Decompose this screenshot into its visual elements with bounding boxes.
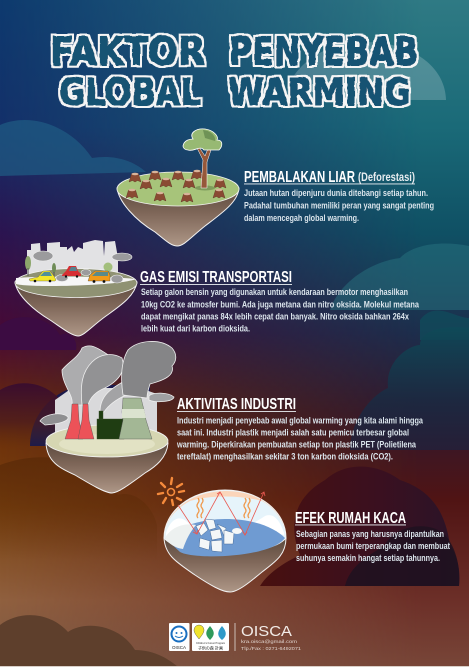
red car <box>62 266 81 278</box>
logo: OISCA: OISCA <box>172 645 186 650</box>
heat waves <box>197 498 250 518</box>
contact block: kra.oisca@gmail.com <box>241 639 297 645</box>
text: gas emisi <box>141 287 420 334</box>
text: aktivitas industri: saat ini. Industri plastik menjadi salah satu pemicu terbesar global <box>177 428 409 438</box>
heading: pembalakan liar: (Deforestasi) <box>358 172 415 184</box>
island: greenhouse dome <box>158 478 286 592</box>
red chimneys <box>65 404 94 439</box>
heading: efek rumah kaca: EFEK RUMAH KACA <box>295 510 406 527</box>
text: aktivitas industri <box>176 416 424 462</box>
title <box>50 30 418 114</box>
trees <box>25 256 112 277</box>
text: gas emisi: lebih kuat dari karbon dioksida. <box>141 324 250 334</box>
title: GLOBAL <box>59 71 201 114</box>
island: deforestation <box>117 129 239 246</box>
contact block <box>241 623 301 652</box>
factory building <box>97 411 124 439</box>
title: PENYEBAB <box>229 30 418 75</box>
island: transport <box>15 240 137 336</box>
title: WARMING <box>228 71 411 114</box>
heading: gas emisi: GAS EMISI TRANSPORTASI <box>140 269 292 286</box>
logo: children's forest program <box>192 623 229 651</box>
text: gas emisi: dapat mengikat panas 84x lebih cepat dan banyak. Nitro oksida bahkan 264x <box>141 312 410 322</box>
smoke <box>40 341 176 425</box>
yellow car <box>29 271 56 282</box>
island: industry <box>40 341 176 493</box>
logo: OISCA <box>169 623 190 651</box>
sea and ice <box>165 519 285 556</box>
text: efek rumah kaca <box>296 529 450 563</box>
text: aktivitas industri: tereftalat) menghasilkan sekitar 3 ton karbon dioksida (CO2). <box>177 452 393 462</box>
heading: aktivitas industri: AKTIVITAS INDUSTRI <box>177 396 296 413</box>
contact block: Tlp./Fax : 0271-6492071 <box>241 646 301 652</box>
contact block: OISCA <box>241 623 292 640</box>
tree <box>183 129 222 190</box>
cooling tower <box>119 398 152 439</box>
title: FAKTOR <box>50 30 205 75</box>
orange car <box>88 271 110 283</box>
text: pembalakan liar: dalam mencegah global warming. <box>244 213 359 223</box>
logo: children's forest program: Children's Forest Program <box>196 642 225 645</box>
smoke clouds <box>33 251 132 283</box>
logo: children's forest program: 子供の森 計画 <box>198 644 223 650</box>
sun <box>158 478 184 505</box>
heading: pembalakan liar: PEMBALAKAN LIAR <box>244 169 355 186</box>
heat arrows <box>178 492 265 535</box>
text: pembalakan liar <box>244 188 434 223</box>
city skyline <box>27 240 118 278</box>
